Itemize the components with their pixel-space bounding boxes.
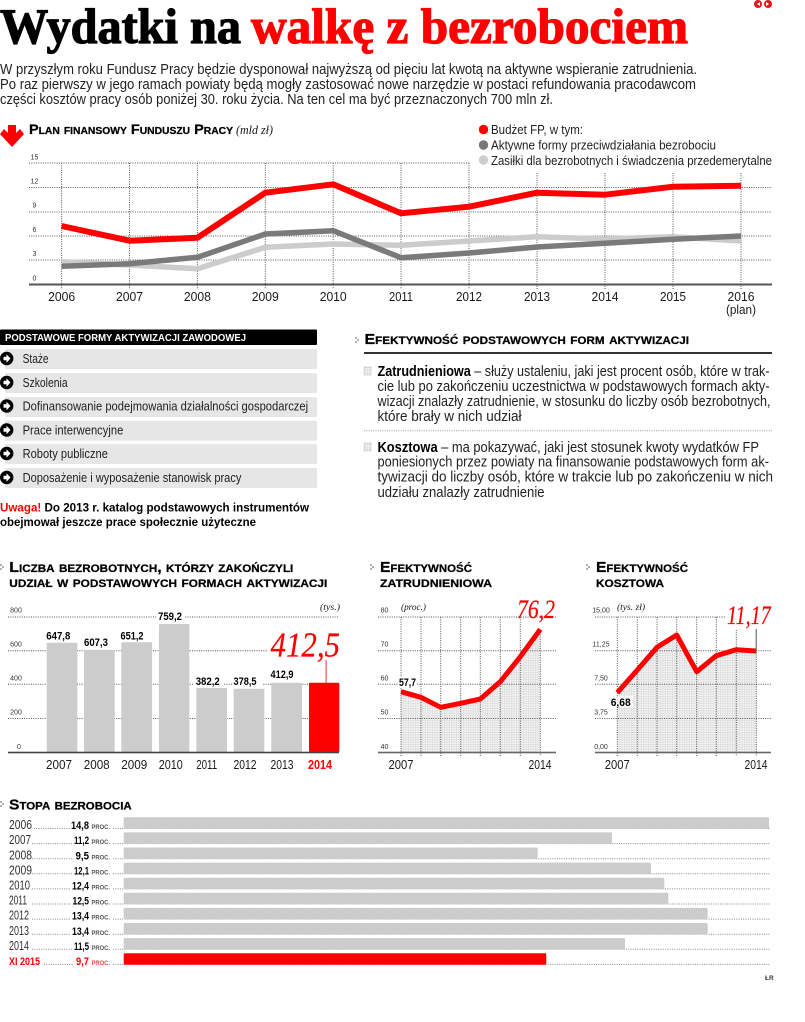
heading: unemployment rate: Stopa bezrobocia bbox=[9, 796, 132, 814]
row 2009: 2009 bbox=[9, 863, 32, 877]
row 2014 bbox=[9, 938, 625, 953]
row 2014: 11,5 bbox=[74, 941, 89, 953]
x axis labels bbox=[48, 289, 756, 317]
row 2012: 2012 bbox=[9, 909, 29, 923]
year labels bbox=[605, 757, 768, 772]
value labels: 651,2 bbox=[120, 630, 144, 642]
intro text: Po raz pierwszy w jego ramach powiaty będą mogły zastosować nowe narzędzie w postaci refundowania pracodawcom bbox=[0, 77, 696, 93]
list item: Dofinansowanie: Dofinansowanie podejmowania działalności gospodarczej bbox=[23, 398, 308, 414]
year labels: 2007 bbox=[46, 757, 72, 772]
row 2007: 11,2 bbox=[74, 835, 89, 847]
row 2014: 2014 bbox=[9, 939, 29, 953]
x axis labels: 2012 bbox=[456, 289, 482, 304]
row 2006: 14,8 bbox=[71, 820, 89, 832]
line chart: employment effectiveness: 80 bbox=[381, 608, 388, 614]
panel heading bbox=[0, 330, 317, 345]
text: Kosztowa bbox=[364, 440, 773, 501]
value labels: 647,8 bbox=[46, 630, 70, 642]
line chart: FP financial plan: 12 bbox=[31, 178, 38, 186]
text: Kosztowa: udziału znalazły zatrudnienie bbox=[378, 485, 544, 501]
row 2013 bbox=[9, 923, 708, 938]
row 2007: PROC. bbox=[92, 839, 110, 846]
list item: Prace interwencyjne: Prace interwencyjne bbox=[23, 422, 123, 438]
row XI 2015: 9,7 bbox=[76, 956, 89, 968]
text: Kosztowa: Kosztowa – ma pokazywać, jaki jest stosunek kwoty wydatków FP bbox=[378, 440, 759, 456]
row 2006 bbox=[9, 817, 769, 832]
text: Zatrudnieniowa: cie lub po zakończeniu uczestnictwa w podstawowych formach akty- bbox=[378, 379, 770, 395]
note: Uwaga: Uwaga! Do 2013 r. katalog podstawowych instrumentów bbox=[0, 500, 310, 514]
row 2011 bbox=[9, 893, 668, 908]
x axis labels: 2006 bbox=[48, 289, 75, 304]
line chart: FP financial plan: 0 bbox=[33, 276, 37, 282]
panel: basic forms of activation bbox=[0, 330, 317, 488]
line chart: employment effectiveness: 40 bbox=[381, 744, 388, 751]
line chart: employment effectiveness: 50 bbox=[381, 710, 388, 716]
value labels: 412,9 bbox=[270, 669, 294, 681]
list item: Szkolenia bbox=[0, 373, 317, 393]
year labels: 2014 bbox=[744, 757, 768, 772]
row 2008: 2008 bbox=[9, 848, 32, 862]
text: Zatrudnieniowa: które brały w nich udział bbox=[378, 409, 522, 425]
line chart: FP financial plan: 6 bbox=[33, 227, 37, 234]
bar chart: unemployed: 600 bbox=[10, 642, 22, 648]
year labels: 2007 bbox=[605, 757, 630, 772]
note: Uwaga bbox=[0, 500, 310, 529]
legend: Aktywne formy przeciwdziałania bezrobociu bbox=[491, 138, 716, 152]
row 2006: 2006 bbox=[9, 818, 32, 832]
value labels: 382,2 bbox=[196, 676, 220, 688]
line chart: cost effectiveness: (tys. zł) bbox=[617, 602, 645, 613]
line chart: FP financial plan: 15 bbox=[31, 154, 38, 162]
icon: publisher logo bbox=[754, 0, 772, 8]
row 2012: PROC. bbox=[92, 915, 110, 922]
start value: 6,68 bbox=[611, 697, 631, 709]
value labels bbox=[46, 611, 294, 688]
text: Zatrudnieniowa bbox=[364, 364, 770, 425]
heading: number of unemployed: udział w podstawowych formach aktywizacji bbox=[9, 574, 327, 591]
text: Kosztowa: tywizacji do liczby osób, które w trakcie lub po zakończeniu w nich bbox=[378, 470, 773, 486]
row 2010: PROC. bbox=[92, 884, 110, 892]
bar chart: unemployed: 200 bbox=[10, 710, 22, 716]
heading: number of unemployed bbox=[0, 559, 327, 591]
list item: Staże bbox=[0, 349, 317, 369]
row 2012 bbox=[9, 908, 708, 923]
heading: employment effectiveness: Efektywność bbox=[380, 559, 472, 576]
heading: number of unemployed: Liczba bezrobotnych, którzy zakończyli bbox=[9, 559, 293, 576]
line chart: employment effectiveness: 70 bbox=[381, 642, 388, 648]
year labels: 2014 bbox=[528, 757, 552, 772]
big value: 11,17: 11,17 bbox=[727, 601, 771, 630]
line chart: employment effectiveness: 60 bbox=[381, 676, 388, 682]
list item: Doposażenie bbox=[0, 468, 317, 488]
bar chart: unemployment rate bbox=[9, 817, 770, 968]
list item: Dofinansowanie bbox=[0, 397, 317, 417]
list item: Staże: Staże bbox=[23, 351, 49, 366]
list item: Doposażenie: Doposażenie i wyposażenie stanowisk pracy bbox=[23, 470, 242, 485]
x axis labels: (plan) bbox=[726, 302, 756, 317]
heading: financial plan: (mld zł) bbox=[236, 122, 273, 137]
bar chart: unemployed: 400 bbox=[10, 676, 22, 682]
big value: 76,2: 76,2 bbox=[517, 594, 555, 624]
row 2009: PROC. bbox=[92, 869, 110, 876]
bar chart: unemployed: (tys.) bbox=[320, 602, 340, 613]
value labels: 378,5 bbox=[234, 676, 256, 688]
year labels: 2008 bbox=[84, 757, 110, 772]
heading: employment effectiveness bbox=[370, 559, 492, 591]
row 2009 bbox=[9, 863, 651, 877]
bars bbox=[47, 624, 339, 752]
x axis labels: 2016 bbox=[728, 289, 754, 304]
big value: 412,5: 412,5 bbox=[270, 626, 340, 664]
row 2008: 9,5 bbox=[76, 850, 89, 862]
x axis labels: 2010 bbox=[320, 289, 347, 304]
heading: financial plan: Plan finansowy Funduszu Pracy bbox=[29, 121, 233, 137]
line chart: cost effectiveness bbox=[592, 601, 772, 772]
row XI 2015: XI 2015 bbox=[9, 956, 40, 968]
row 2010 bbox=[9, 878, 664, 892]
line chart: employment effectiveness: (proc.) bbox=[401, 602, 426, 613]
line chart: employment effectiveness bbox=[378, 594, 557, 772]
line chart: cost effectiveness: 11,25 bbox=[592, 642, 610, 648]
row 2007 bbox=[9, 832, 612, 847]
list item: Prace interwencyjne bbox=[0, 421, 317, 441]
year labels: 2014 bbox=[308, 757, 333, 772]
row 2010: 2010 bbox=[9, 878, 30, 892]
white backing for 2014 big value bbox=[268, 628, 342, 659]
row 2013: 13,4 bbox=[72, 926, 90, 938]
line chart: cost effectiveness: 7,50 bbox=[594, 676, 608, 682]
row XI 2015 bbox=[9, 953, 546, 968]
heading: Efektywność podstawowych form aktywizacji bbox=[364, 331, 689, 348]
x axis labels: 2009 bbox=[252, 289, 279, 304]
list item: Szkolenia: Szkolenia bbox=[23, 375, 68, 390]
bar chart: unemployed: 800 bbox=[10, 608, 22, 614]
row 2010: 12,4 bbox=[72, 880, 90, 892]
text: Zatrudnieniowa: Zatrudnieniowa – służy ustaleniu, jaki jest procent osób, które w trak- bbox=[378, 364, 770, 380]
line: FP budget bbox=[62, 184, 741, 241]
title bbox=[0, 0, 688, 54]
line chart: FP financial plan: 3 bbox=[33, 251, 37, 258]
row 2014: PROC. bbox=[92, 945, 110, 952]
row 2013: 2013 bbox=[9, 924, 29, 938]
x axis labels: 2011 bbox=[389, 289, 413, 304]
row 2012: 13,4 bbox=[72, 911, 90, 923]
row 2013: PROC. bbox=[92, 930, 110, 937]
panel: effectiveness explanation bbox=[355, 331, 773, 501]
x axis labels: 2008 bbox=[184, 289, 211, 304]
row 2007: 2007 bbox=[9, 833, 31, 847]
row XI 2015: PROC. bbox=[92, 960, 110, 967]
line chart: FP financial plan: 9 bbox=[33, 202, 37, 210]
year labels bbox=[388, 757, 552, 772]
x axis labels: 2015 bbox=[660, 289, 686, 304]
value labels: 607,3 bbox=[84, 637, 108, 649]
legend: Budżet FP, w tym: bbox=[491, 122, 583, 137]
panel heading: PODSTAWOWE FORMY AKTYWIZACJI ZAWODOWEJ bbox=[5, 332, 246, 344]
row 2011: PROC. bbox=[92, 900, 110, 907]
x axis labels: 2014 bbox=[592, 289, 618, 304]
source credit: ŁR bbox=[765, 975, 774, 982]
row 2011: 12,5 bbox=[72, 896, 89, 908]
year labels: 2013 bbox=[270, 757, 294, 772]
year labels bbox=[46, 757, 333, 772]
x axis labels: 2013 bbox=[524, 289, 550, 304]
icon: red down arrow bbox=[0, 125, 24, 147]
list item: Roboty publiczne bbox=[0, 444, 317, 464]
intro text: części kosztów pracy osób poniżej 30. roku życia. Na ten cel ma być przeznaczonych 700 mln zł. bbox=[0, 92, 553, 108]
list item: Roboty publiczne: Roboty publiczne bbox=[23, 446, 108, 461]
value labels: 759,2 bbox=[158, 611, 182, 623]
line chart: cost effectiveness: 0,00 bbox=[594, 744, 608, 751]
legend: Zasiłki dla bezrobotnych i świadczenia przedemerytalne bbox=[491, 153, 772, 168]
note: Uwaga: obejmował jeszcze prace społecznie użyteczne bbox=[0, 515, 256, 529]
row 2009: 12,1 bbox=[74, 865, 89, 877]
row 2008 bbox=[9, 848, 538, 862]
row 2008: PROC. bbox=[92, 854, 110, 861]
row 2011: 2011 bbox=[9, 894, 27, 908]
year labels: 2012 bbox=[234, 757, 256, 772]
x axis labels: 2007 bbox=[116, 289, 143, 304]
line chart: FP financial plan bbox=[29, 154, 772, 317]
year labels: 2009 bbox=[121, 757, 147, 772]
row 2006: PROC. bbox=[92, 824, 110, 831]
intro text bbox=[0, 62, 697, 108]
bar chart: unemployed: 0 bbox=[17, 744, 21, 751]
year labels: 2010 bbox=[159, 757, 183, 772]
line chart: cost effectiveness: 3,75 bbox=[594, 710, 608, 716]
bar chart: unemployed bbox=[8, 602, 342, 772]
heading: employment effectiveness: zatrudnieniowa bbox=[380, 574, 492, 591]
year labels: 2011 bbox=[196, 757, 217, 772]
line: benefits bbox=[62, 237, 741, 269]
year labels: 2007 bbox=[388, 757, 414, 772]
line: active forms bbox=[62, 231, 741, 266]
legend bbox=[479, 122, 772, 168]
heading: cost effectiveness bbox=[586, 559, 688, 591]
heading: cost effectiveness: Efektywność bbox=[596, 559, 688, 576]
line chart: cost effectiveness: 15,00 bbox=[592, 608, 610, 614]
start value: 57,7 bbox=[399, 677, 416, 689]
intro text: W przyszłym roku Fundusz Pracy będzie dysponował najwyższą od pięciu lat kwotą na aktywne wspieranie zatrudnienia. bbox=[0, 62, 697, 78]
heading: cost effectiveness: kosztowa bbox=[596, 574, 664, 591]
